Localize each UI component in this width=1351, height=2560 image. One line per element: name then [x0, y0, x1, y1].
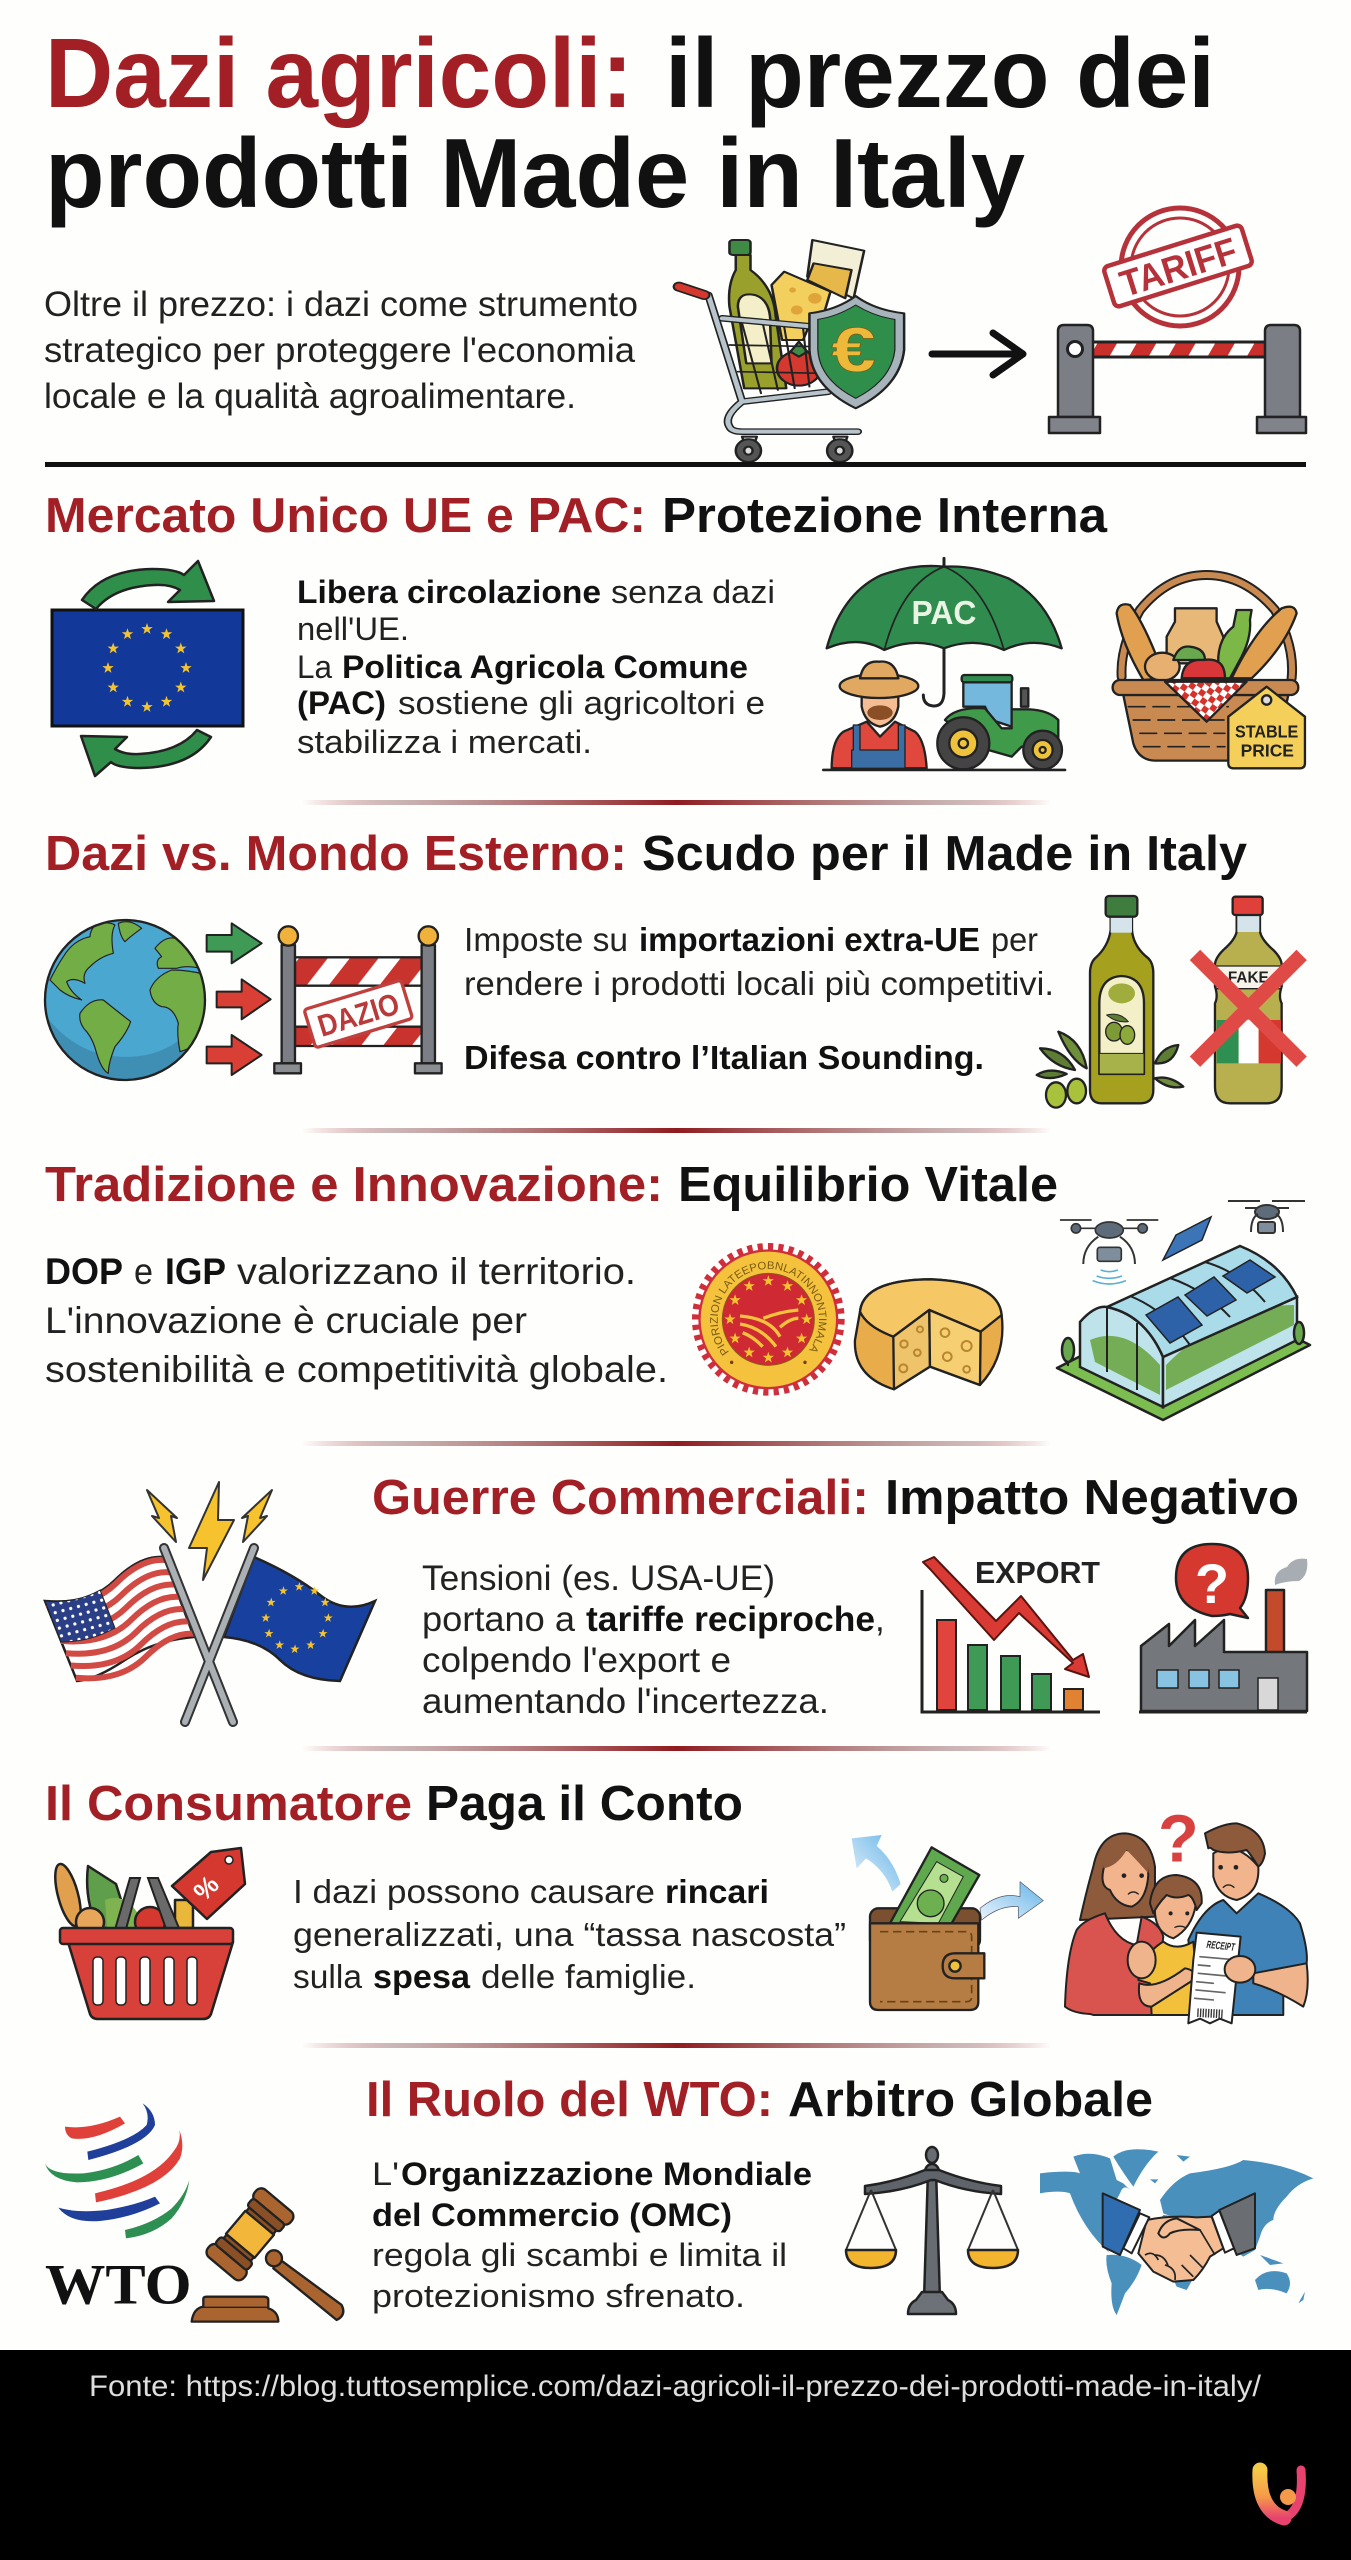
icon: gavel [192, 2186, 343, 2322]
text block: Tensioni (es. USA-UE) [422, 1559, 775, 1598]
panel: Il Consumatore [45, 1777, 1308, 2023]
icon: factory with question mark [1139, 1544, 1307, 1712]
heading: Paga il Conto [426, 1777, 743, 1831]
text block: Politica Agricola Comune [342, 649, 748, 685]
text block: I dazi possono causare [293, 1873, 655, 1910]
text block [293, 1873, 846, 1995]
icon: wallet with banknote [852, 1835, 1043, 2010]
text block: spesa [373, 1958, 471, 1995]
text block: tariffe reciproche [586, 1600, 875, 1639]
icon: shopping cart with shield: € [831, 315, 876, 386]
text block: protezionismo sfrenato. [372, 2278, 745, 2314]
bar chart: export: EXPORT [975, 1555, 1100, 1590]
icon: lightning bolts [147, 1482, 272, 1580]
text block: rincari [665, 1873, 769, 1910]
text block [297, 574, 775, 760]
icon: barricade with dazio stamp: DAZIO [314, 987, 404, 1044]
icon: worried family with receipt: ? [1158, 1803, 1199, 1877]
heading: Il Consumatore [45, 1777, 412, 1831]
title: prodotti Made in Italy [45, 118, 1025, 228]
icon: shopping basket with price tag [50, 1848, 245, 2019]
title: il prezzo dei [665, 18, 1215, 128]
text block: Libera circolazione [297, 574, 601, 610]
right drone [1228, 1201, 1305, 1233]
text block: portano a [422, 1600, 576, 1639]
text block: IGP [165, 1251, 226, 1292]
text block: sostiene gli agricoltori e [398, 685, 765, 721]
intro text: locale e la qualità agroalimentare. [44, 377, 576, 416]
icon: food basket with stable price tag: STABLE [1235, 721, 1298, 741]
icon: cheese wheel [855, 1279, 1002, 1389]
divider [302, 2043, 1051, 2048]
icon: olive oil bottle [1037, 896, 1183, 1108]
heading: Scudo per il Made in Italy [642, 827, 1247, 881]
icon: road barrier [1049, 325, 1306, 433]
title [45, 18, 1215, 228]
text block: Difesa contro l’Italian Sounding. [464, 1039, 984, 1076]
icon: PAC umbrella, farmer and tractor: PAC [911, 595, 976, 632]
heading [45, 827, 1247, 881]
intro text: Oltre il prezzo: i dazi come strumento [44, 285, 638, 324]
text block: per [991, 921, 1038, 958]
panel: Guerre Commerciali [45, 1471, 1307, 1722]
text block [422, 1559, 885, 1721]
horizontal rule [45, 462, 1306, 467]
icon: DOP IGP seal: PIORIZION LATEEPOBNLATINNONTIMALA [710, 1261, 827, 1356]
intro text: strategico per proteggere l'economia [44, 331, 636, 370]
panel: Dazi vs Mondo Esterno [45, 827, 1302, 1108]
footer band [0, 2350, 1351, 2560]
text block: senza dazi [611, 574, 775, 610]
icon: WTO logo [45, 2103, 192, 2316]
heading [45, 1158, 1058, 1212]
heading [45, 1777, 743, 1831]
heading [45, 489, 1108, 543]
heading: Equilibrio Vitale [678, 1158, 1058, 1212]
text block: nell'UE. [297, 611, 409, 647]
heading: Tradizione e Innovazione: [45, 1158, 663, 1212]
icon: shopping cart with shield [679, 240, 904, 462]
text block: L'innovazione è cruciale per [45, 1300, 527, 1341]
icon: balance scale [846, 2147, 1018, 2314]
icon: world map with handshake [1040, 2149, 1313, 2315]
icon: shopping basket with price tag: % [187, 1869, 225, 1907]
icon: food basket with stable price tag: PRICE [1241, 741, 1294, 761]
text block: regola gli scambi e limita il [372, 2237, 787, 2273]
icon: food basket with stable price tag [1113, 575, 1305, 768]
icon: worried family with receipt: RECEIPT [1206, 1939, 1236, 1954]
divider [302, 1441, 1051, 1446]
text block: del Commercio (OMC) [372, 2197, 732, 2233]
logo [1260, 2470, 1301, 2518]
text block: rendere i prodotti locali più competitivi. [464, 965, 1054, 1002]
heading [372, 1471, 1299, 1525]
text block: sostenibilità e competitività globale. [45, 1349, 668, 1390]
text block: , [875, 1600, 885, 1639]
text block: La [297, 649, 332, 685]
heading [366, 2073, 1153, 2127]
source line: Fonte: https://blog.tuttosemplice.com/dazi-agricoli-il-prezzo-dei-prodotti-made-in-italy/ [89, 2370, 1262, 2403]
text block [464, 921, 1054, 1076]
heading: Arbitro Globale [788, 2073, 1153, 2127]
icon: barricade with dazio stamp [274, 926, 442, 1073]
text block: valorizzano il territorio. [237, 1251, 636, 1292]
icon: WTO logo: WTO [45, 2253, 192, 2316]
icon: fake bottle crossed out: FAKE [1228, 970, 1269, 987]
heading: Protezione Interna [662, 489, 1108, 543]
text block: L' [372, 2156, 399, 2192]
divider [302, 800, 1051, 805]
text block: Imposte su [464, 921, 628, 958]
icon: EU flag with circular arrows [52, 561, 243, 776]
icon: PAC umbrella, farmer and tractor [823, 558, 1065, 770]
heading: Impatto Negativo [885, 1471, 1299, 1525]
heading: Mercato Unico UE e PAC: [45, 489, 646, 543]
intro text [44, 285, 638, 416]
text block: (PAC) [297, 685, 386, 721]
icon: factory with question mark: ? [1195, 1552, 1229, 1615]
text block [372, 2156, 812, 2314]
text block: e [134, 1251, 153, 1292]
arrow [932, 333, 1023, 375]
heading: Guerre Commerciali: [372, 1471, 869, 1525]
bar chart: export [922, 1555, 1100, 1712]
text block: colpendo l'export e [422, 1641, 731, 1680]
text block: sulla [293, 1958, 363, 1995]
icon: tariff stamp [1103, 208, 1253, 326]
heading: Il Ruolo del WTO: [366, 2073, 773, 2127]
text block: stabilizza i mercati. [297, 724, 592, 760]
icon: greenhouse with drones [1057, 1201, 1310, 1420]
panel: Mercato Unico [45, 489, 1305, 776]
icon: tariff stamp: TARIFF [1115, 230, 1242, 305]
panel: Tradizione e Innovazione [45, 1158, 1312, 1422]
icon: crossed US and EU flags [45, 1548, 375, 1722]
panel: Il Ruolo del WTO [45, 2073, 1313, 2322]
icon: worried family with receipt [1065, 1803, 1308, 2023]
text block [45, 1251, 668, 1390]
icon: fake bottle crossed out [1195, 897, 1302, 1103]
left drone [1060, 1220, 1158, 1284]
text block: generalizzati, una “tassa nascosta” [293, 1916, 846, 1953]
divider [302, 1746, 1051, 1751]
title: Dazi agricoli: [45, 18, 633, 128]
heading: Dazi vs. Mondo Esterno: [45, 827, 627, 881]
text block: DOP [45, 1251, 123, 1292]
icon: import arrows [207, 923, 271, 1075]
icon: DOP IGP seal [692, 1243, 845, 1396]
text block: delle famiglie. [481, 1958, 696, 1995]
text block: aumentando l'incertezza. [422, 1682, 829, 1721]
divider [302, 1128, 1051, 1133]
text block: importazioni extra-UE [639, 921, 980, 958]
text block: Organizzazione Mondiale [401, 2156, 812, 2192]
icon: globe [45, 920, 207, 1080]
